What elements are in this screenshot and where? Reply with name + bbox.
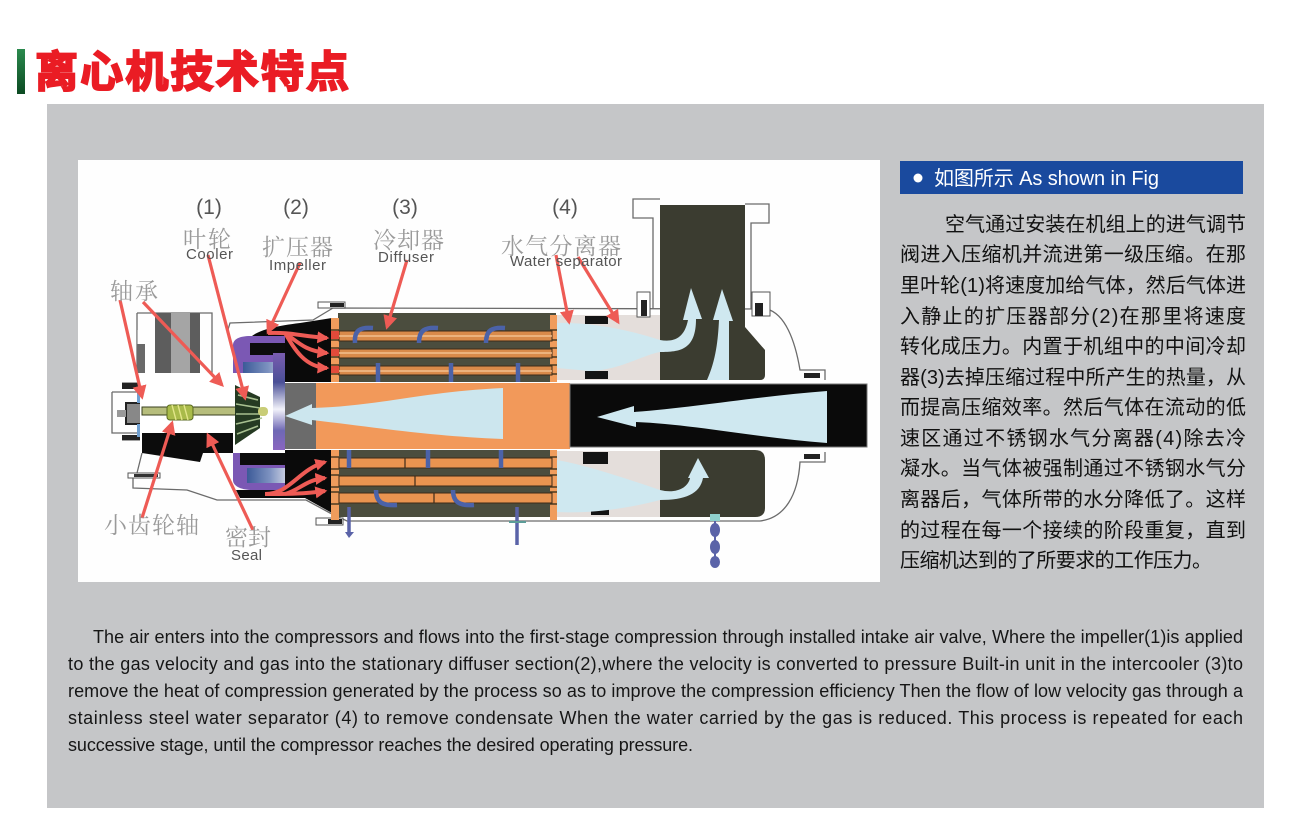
diagram labels: (1) — [196, 196, 222, 219]
title text: 离心机技术特点 — [35, 49, 349, 97]
water separator top — [557, 315, 660, 380]
diagram labels: (4) — [552, 196, 578, 219]
text block: English description: to the gas velocity and gas into the stationary diffuser section(2),where the velocity is converted to pressure Built-in unit in the intercooler (3)to — [68, 654, 1243, 674]
water separator bottom — [557, 451, 660, 517]
impeller — [235, 385, 268, 445]
panel: grey content panel — [47, 104, 1264, 808]
diagram labels: 扩压器 — [262, 229, 333, 262]
purple volute top — [233, 336, 285, 376]
diagram labels: 叶轮 — [183, 221, 231, 254]
diagram labels: Water separator — [510, 253, 622, 270]
diagram labels: Cooler — [186, 246, 233, 263]
bottom separator flow with curved arrow — [557, 458, 709, 512]
black casing under shaft — [142, 433, 233, 462]
red flow arrows top — [268, 333, 327, 368]
text block: English description — [68, 627, 1244, 755]
diagram labels: (2) — [283, 196, 309, 219]
left bearing housing — [137, 313, 200, 373]
diagram labels: Impeller — [269, 257, 326, 274]
shaft — [142, 405, 238, 420]
bullet — [914, 174, 922, 182]
cooler bottom section — [331, 450, 557, 520]
text block: Chinese description: 空气通过安装在机组上的进气调节 — [945, 213, 1246, 236]
text block: Chinese description: 凝水。当气体被强制通过不锈钢水气分 — [900, 457, 1246, 480]
central white chamber — [140, 373, 273, 453]
title accent bar — [17, 49, 25, 94]
text block: Chinese description: 而提高压缩效率。然后气体在流动的低 — [900, 396, 1246, 419]
text block: Chinese description: 速区通过不锈钢水气分离器(4)除去冷 — [900, 427, 1246, 450]
diagram labels: Diffuser — [378, 249, 434, 266]
text block: Chinese description: 离器后，气体所带的水分降低了。这样 — [900, 488, 1246, 511]
inlet flow arrow — [285, 388, 503, 439]
text block: Chinese description: 入静止的扩压器部分(2)在那里将速度 — [900, 305, 1246, 328]
outlet dark block bottom — [660, 450, 765, 517]
text block: English description: successive stage, until the compressor reaches the desired operating pressure. — [68, 735, 693, 755]
text block: Chinese description: 器(3)去掉压缩过程中所产生的热量，从 — [900, 366, 1246, 389]
title — [17, 49, 349, 97]
heading text: 如图所示 As shown in Fig — [934, 167, 1159, 190]
text block: Chinese description: 里叶轮(1)将速度加给气体，然后气体进 — [900, 274, 1246, 297]
panel: compressor diagram — [78, 160, 880, 582]
text block: English description: The air enters into the compressors and flows into the first-stage compression through installed intake air valve, Where the impeller(1)is applied — [93, 627, 1243, 647]
grey inlet duct — [285, 383, 316, 449]
discharge flow arrow — [597, 391, 827, 443]
central orange core — [316, 383, 570, 449]
purple vertical strip — [273, 353, 285, 450]
discharge pipe — [570, 384, 867, 447]
top separator flow with curved arrow — [557, 288, 702, 371]
black diffuser bottom — [236, 450, 332, 513]
diagram labels — [104, 196, 622, 564]
diagram labels: 密封 — [225, 519, 271, 552]
diagram labels: 水气分离器 — [501, 228, 621, 261]
diagram labels: 小齿轮轴 — [104, 507, 199, 540]
left end cap — [117, 383, 143, 440]
purple volute bottom — [233, 453, 285, 490]
text block: Chinese description: 的过程在每一个接续的阶段重复，直到 — [900, 519, 1246, 542]
diagram labels: 冷却器 — [373, 222, 444, 255]
section heading bar — [900, 161, 1243, 194]
text block: Chinese description: 压缩机达到的了所要求的工作压力。 — [900, 549, 1212, 572]
bottom pipes and drain — [345, 507, 720, 568]
flange bolts — [637, 292, 820, 459]
housing outline — [112, 199, 825, 521]
text block: Chinese description — [900, 213, 1246, 572]
text block: English description: stainless steel water separator (4) to remove condensate When the water carried by the gas is reduced. This process is repeated for each — [68, 708, 1243, 728]
cooler top section — [331, 313, 557, 382]
text block: Chinese description: 转化成压力。内置于机组中的中间冷却 — [900, 335, 1246, 358]
diagram labels: 轴承 — [110, 273, 158, 306]
outlet dark block top — [660, 205, 765, 380]
red flow arrows bottom — [265, 462, 325, 494]
text block: English description: remove the heat of compression generated by the process so as to improve the compression efficiency Then the flow of low velocity gas through a — [68, 681, 1244, 701]
black diffuser top — [252, 318, 332, 382]
diagram labels: (3) — [392, 196, 418, 219]
bolts — [128, 302, 345, 525]
second upward flow arrow — [707, 289, 733, 380]
callout arrows — [120, 255, 618, 530]
text block: Chinese description: 阀进入压缩机并流进第一级压缩。在那 — [900, 243, 1246, 266]
diagram labels: Seal — [231, 547, 262, 564]
